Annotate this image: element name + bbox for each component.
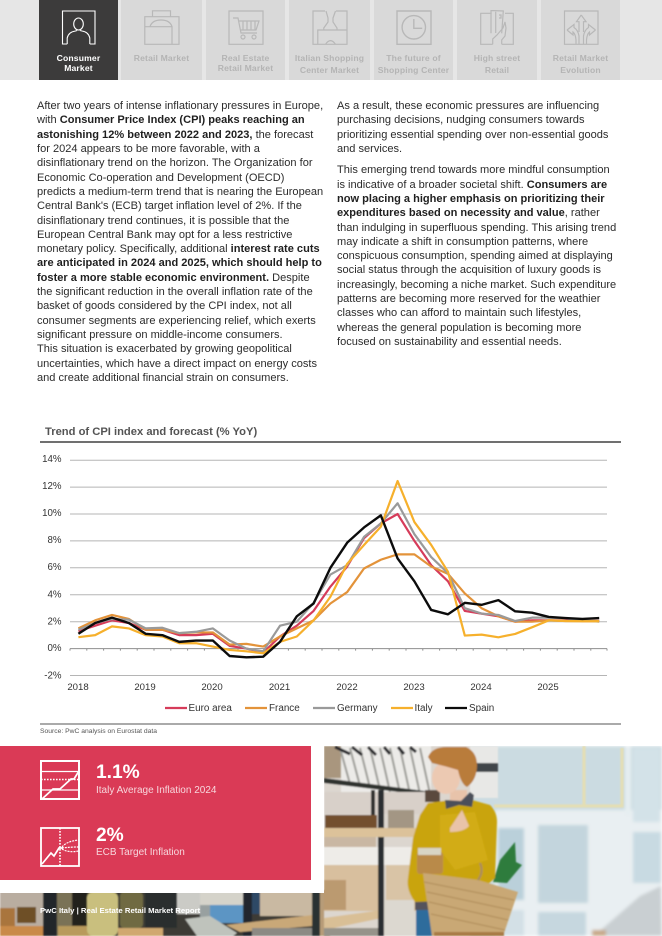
y axis labels: 10% — [42, 508, 62, 519]
tab: high street retail — [457, 0, 537, 80]
text column: left: After two years of intense inflationary pressures in Europe, — [37, 100, 323, 112]
woman: face — [432, 762, 460, 794]
tab: real estate retail market: Retail Market — [218, 63, 273, 73]
text column: right: than indulging in superfluous spending. This arising trend — [337, 222, 616, 234]
woman: sweater — [408, 800, 497, 902]
woman: basket — [423, 873, 518, 936]
text column: left: astonishing 12% between 2022 and 2023, the forecast — [37, 129, 313, 141]
panel: key inflation figures — [0, 746, 311, 880]
text column: left: Economic Co-operation and Development (OECD) — [37, 172, 284, 184]
source note: Source: PwC analysis on Eurostat data — [40, 728, 157, 735]
tab: the future of shopping center: Shopping Center — [378, 65, 449, 75]
text column: right: whereas the general population is becoming more — [337, 322, 581, 334]
text column: right: is indicative of a broader societal shift. Consumers are — [337, 179, 607, 191]
stat: 1.1% — [96, 762, 216, 796]
right bottles — [467, 746, 498, 798]
tab: real estate retail market: Real Estate — [222, 53, 269, 63]
text column: left: disinflationary trend on the horizon. The Organization for — [37, 157, 313, 169]
text column: left: monetary policy. Specifically, additional interest rate cuts — [37, 243, 320, 255]
y axis labels: -2% — [44, 670, 62, 682]
icon: target chart — [40, 827, 80, 867]
series: Germany — [78, 503, 599, 651]
text column: left: Central Bank's (ECB) target inflation level of 2%. If the — [37, 200, 302, 212]
text column: right: and services. — [337, 143, 402, 155]
tab: retail market evolution: Retail Market — [553, 53, 608, 63]
chart title: Trend of CPI index and forecast (% YoY) — [45, 426, 257, 438]
tab: high street retail: High street — [474, 53, 520, 63]
shelving — [324, 746, 470, 936]
text column: left: for 2024 appears to be more favorable, with a — [37, 143, 260, 155]
woman: scarf — [445, 792, 474, 809]
text column: left: uncertainties, which have a direct impact on energy costs — [37, 358, 317, 370]
footer text: PwC Italy | Real Estate Retail Market Report — [40, 906, 200, 915]
tab: consumer market: Consumer — [57, 53, 100, 63]
text column: left: predicts a medium-term trend that is nearing the European — [37, 186, 323, 198]
text column: right: now placing a higher emphasis on prioritizing their — [337, 193, 605, 205]
tab: italian shopping center market — [289, 0, 370, 80]
tab: the future of shopping center: The future of — [386, 53, 441, 63]
tab: consumer market: Market — [64, 63, 93, 73]
stat: 1.1%: 1.1% — [96, 762, 140, 783]
text column: right: As a result, these economic pressures are influencing — [337, 100, 599, 112]
yellow pipe — [494, 746, 622, 806]
x axis labels: 2020 — [201, 682, 223, 693]
text column: left: European Central Bank may opt for a less restrictive — [37, 229, 292, 241]
series: Euro area — [78, 514, 599, 653]
y axis labels: 14% — [42, 454, 62, 465]
series: France — [78, 554, 599, 647]
tab: italian shopping center market: Center Market — [300, 65, 359, 75]
tab: the future of shopping center — [374, 0, 453, 80]
y axis labels: 8% — [47, 535, 62, 546]
background window — [470, 746, 662, 936]
text column: left: significant pressure on middle-income consumers. — [37, 329, 283, 341]
text column: left: and create additional financial strain on consumers. — [37, 372, 289, 384]
store shelves left band — [0, 890, 330, 936]
x axis labels: 2023 — [403, 682, 425, 693]
legend: Spain — [469, 703, 494, 714]
text column: left: disinflationary trend continues, it is possible that the — [37, 214, 289, 226]
x axis labels: 2018 — [67, 682, 89, 693]
text column: right: expenditures based on necessity and value, rather — [337, 207, 600, 219]
legend: Germany — [337, 703, 378, 714]
y axis labels: 0% — [47, 643, 62, 654]
woman: jar — [417, 852, 443, 874]
series: Spain — [78, 515, 599, 657]
series: Italy — [78, 481, 599, 653]
stat: 1.1%: Italy Average Inflation 2024 — [96, 785, 216, 796]
series lines — [78, 481, 599, 657]
y axis labels: 4% — [47, 590, 62, 600]
x axis labels: 2021 — [269, 682, 290, 693]
text column: right: prioritizing essential spending over non-essential goods — [337, 129, 608, 141]
legend: Euro area — [188, 703, 232, 714]
y axis labels: 12% — [42, 481, 62, 492]
text column: left: consumer segments are experiencing relief, which exerts — [37, 315, 316, 327]
text column: right: patterns are becoming more reserved for the weathier — [337, 293, 600, 305]
text column: right: conspicuous consumption, spending aimed at displaying — [337, 250, 613, 262]
navigation header — [0, 0, 662, 80]
text column: left — [37, 100, 323, 384]
text column: left: This situation is exacerbated by growing geopolitical — [37, 343, 292, 355]
y axis labels: 6% — [47, 562, 62, 573]
x axis labels: 2024 — [470, 682, 492, 693]
text column: right: purchasing decisions, nudging consumers towards — [337, 114, 584, 126]
text column: right: classes who can afford to maintain such lifestyles, — [337, 307, 581, 319]
stat: 2%: ECB Target Inflation — [96, 847, 185, 858]
legend: France — [269, 703, 300, 714]
stat: 2%: 2% — [96, 825, 124, 846]
x axis labels — [67, 682, 559, 693]
text column: right — [337, 100, 616, 348]
text column: right: focused on sustainability and essential needs. — [337, 336, 562, 348]
text column: left: are anticipated in 2024 and 2025, which should help to — [37, 257, 322, 269]
text column: left: the significant reduction in the overall inflation rate of the — [37, 286, 313, 298]
tab: retail market evolution — [541, 0, 620, 80]
x axis labels: 2022 — [336, 682, 358, 693]
x axis labels: 2025 — [537, 682, 559, 693]
legend: Italy — [414, 703, 433, 714]
woman: neck — [450, 790, 467, 802]
photo: shopper in zero-waste store — [0, 746, 662, 936]
text column: left: basket of goods considered by the CPI index, not all — [37, 300, 292, 312]
tab: consumer market — [39, 0, 118, 80]
woman: hair — [428, 747, 477, 787]
x axis labels: 2019 — [134, 682, 156, 693]
white frame around red panel — [0, 746, 324, 893]
text column: right: social status through the acquisition of luxury goods is — [337, 264, 601, 276]
legend — [165, 703, 494, 714]
tab: retail market evolution: Evolution — [560, 65, 601, 75]
tab: retail market — [121, 0, 202, 80]
text column: left: foster a more stable economic environment. Despite — [37, 272, 310, 284]
tab: retail market: Retail Market — [134, 53, 189, 63]
stat: 2% — [96, 825, 185, 858]
woman: leaves — [493, 842, 522, 883]
text column: right: increasingly, becoming a niche market. Such expenditure — [337, 279, 616, 291]
text column: left: with Consumer Price Index (CPI) peaks reaching an — [37, 114, 305, 126]
tab: italian shopping center market: Italian Shopping — [295, 53, 364, 63]
line chart: CPI trend — [40, 441, 621, 735]
tab: real estate retail market — [206, 0, 285, 80]
text column: right: This emerging trend towards more mindful consumption — [337, 164, 610, 176]
text column: right: may indicate a shift in consumption patterns, where — [337, 236, 588, 248]
icon: inflation chart — [40, 760, 80, 800]
tab: high street retail: Retail — [485, 65, 509, 75]
woman: jeans — [416, 905, 434, 936]
y axis labels — [42, 454, 62, 682]
y axis labels: 2% — [47, 616, 62, 628]
